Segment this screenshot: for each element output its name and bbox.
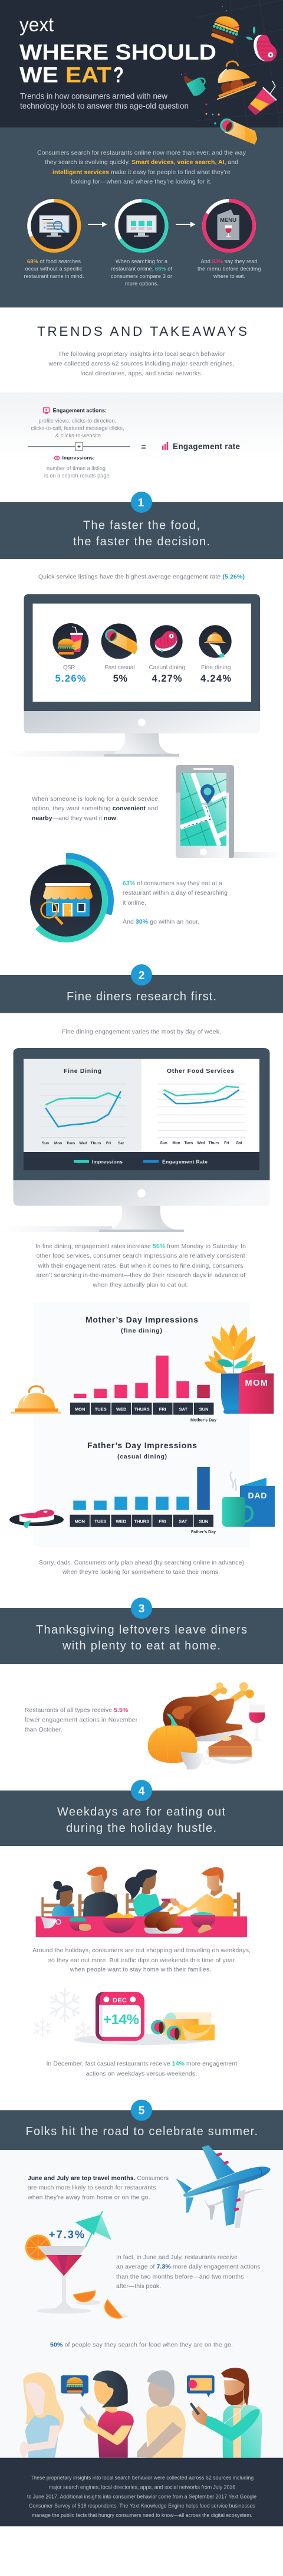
bowl 3 [191,1912,215,1915]
label: engagement actions: clicks-to-call, featured message clicks, [31,425,124,431]
icon: bars [162,442,168,450]
bar chart: mothers day: WED [116,1407,127,1412]
heading: with plenty to eat at home. [62,1639,221,1652]
caption: 66%: When searching for a [116,258,168,264]
text: 14% paragraph: In December, fast casual restaurants receive 14% more engagement [46,2060,237,2067]
heading: trends and takeaways: TRENDS AND TAKEAWAYS [37,324,247,339]
label: impressions: is on a search results page [44,473,110,479]
text: june and july [27,2175,169,2201]
heading: during the holiday hustle. [66,1822,216,1835]
heading [57,1806,225,1835]
speech bubble: burger [61,2375,88,2397]
text: trends intro: were collected across 62 sources including major search engines, [48,360,235,367]
illustration: plane [176,2145,270,2228]
panel: section 3 banner [0,1598,283,1664]
text: 7.3% paragraph: an average of 7.3% more daily engagement actions [116,2263,261,2270]
panel: footer: Consumer Survey of 518 respondents. The Yext Knowledge Engine helps food service businesses [29,2503,255,2509]
caption: 68%: occur without a specific [25,266,83,271]
heading: fathers day: Father’s Day Impressions [87,1441,197,1450]
text: 56% paragraph: with their engagement rates. But when it comes to fine dining, consumers [38,1262,243,1269]
text: 56% paragraph: other food services, consumer search impressions are relatively consistent [37,1252,245,1259]
text: 14% paragraph [46,2060,237,2077]
stat circle: 66% [117,201,166,251]
bar chart: fathers day [70,1467,216,1534]
number badge [131,2100,152,2121]
chart: other food services: Wed [197,1141,205,1145]
number badge: 5 [139,2105,145,2117]
bar chart: fathers day: SUN [199,1519,208,1524]
chart: fine dining: Fine Dining [64,1068,101,1075]
girl [52,1881,74,1916]
heading: mothers day: Mother’s Day Impressions [85,1315,198,1324]
subtitle: Trends in how consumers armed with new [20,92,167,100]
arrow [88,222,106,227]
chart: fine dining: Tues [67,1141,75,1145]
text: trends intro [48,351,235,377]
chart: fine dining: Mon [54,1141,62,1145]
icon: steak on plate [9,1510,64,1528]
illustration: flying food [181,6,277,146]
text: 14% paragraph: actions on weekdays versus weekends. [86,2070,197,2077]
icon: burrito [101,623,140,659]
label: engagement actions: profile views, clicks-to-direction, [39,418,116,424]
panel: summer background [0,2150,283,2458]
label: engagement actions: & clicks-to-website [55,433,101,438]
label: +7.3%: +7.3% [49,2229,84,2241]
illustration: family at the table [36,1867,247,1937]
legend: Engagement Rate [162,1159,208,1165]
text: sorry dads: when they’re looking for somewhere to take their moms. [62,1569,220,1576]
title: WE [19,63,58,87]
caption: 68%: restaurant name in mind. [24,273,84,279]
icon: served cloche [199,625,232,658]
illustration: cocktail [25,2211,128,2319]
chart: other food services: Mon [172,1141,180,1145]
icon: drink cup [248,81,277,115]
legend [24,1152,259,1170]
divide line: ÷ [77,444,81,450]
illustration: thanksgiving dinner [148,1682,265,1769]
bar chart: fathers day: THURS [134,1519,149,1524]
number badge: 1 [138,497,144,509]
panel: footer: manage the public facts that hungry consumers need to know—all across the digital ecosystem. [32,2512,252,2518]
bearded man [190,2368,262,2458]
number badge [131,964,152,986]
stat labels: Casual dining [149,665,185,671]
icon: coffee and dad card [222,1472,275,1527]
text: holiday paragraph: so they eat out more. But traffic dips on weekends this time of year [48,1957,235,1964]
text: 7.3% paragraph: In fact, in June and July, restaurants receive [116,2254,238,2261]
heading: mothers day [85,1315,198,1334]
text: trends intro: local directories, apps, and social networks. [80,370,203,377]
stat circle: 83%: MENU [220,217,236,224]
text: convenient and nearby: option, they want something convenient and [32,805,158,812]
label: impressions: Impressions: [62,455,95,461]
text: quick service: Quick service listings have the highest average engagement rate (5.26%) [38,574,245,581]
stat circle: 68% [29,201,79,251]
number badge [131,1598,152,1619]
text: 5.5%: Restaurants of all types receive 5.5% [25,1707,129,1714]
caption: 83%: where to eat. [213,273,245,279]
icon: steak [150,625,183,658]
panel: footer [0,2458,283,2526]
text: 63% stat: restaurant within a day of researching [123,889,228,896]
gravy boat [40,1916,56,1928]
text: holiday paragraph [32,1947,251,1973]
stat values: 5.26% [55,673,86,684]
bar chart: fathers day: TUES [94,1519,106,1524]
panel: section 1 banner [0,492,283,559]
turkey [144,1928,183,1934]
caption: 83%: And 83% say they read [200,258,257,264]
number badge: 3 [139,1603,144,1615]
subtitle: technology look to answer this age-old question [20,102,189,110]
caption: 83% [198,258,261,279]
chart: fine dining: Thurs [90,1141,101,1145]
text: june and july: when they’re away from home or on the go. [27,2194,150,2201]
label: engagement actions [31,407,124,438]
text: sorry dads [39,1559,244,1576]
label: engagement rate: Engagement rate [173,442,240,451]
monitor: fine dining vs other charts [0,1048,270,1232]
chart: fine dining: Sat [118,1141,124,1145]
illustration: burritos [151,2012,215,2040]
panel: section 2 banner [0,964,283,1013]
intro paragraph: intelligent services make it easy for people to find what they’re [52,169,231,176]
man 1 [83,1867,118,1929]
icon: monitor [44,408,50,413]
bar chart: mothers day: SUN [199,1407,209,1412]
stat values [55,673,231,684]
text: 56% paragraph [35,1243,246,1289]
number badge [131,492,152,513]
chart: fine dining: Fri [106,1141,111,1145]
text: june and july: June and July are top travel months. Consumers [28,2175,169,2182]
legend: Impressions [92,1159,123,1165]
icon: burger [210,6,242,44]
bar chart: mothers day: FRI [159,1407,166,1412]
heading: Thanksgiving leftovers leave diners [36,1623,247,1636]
text: holiday paragraph: Around the holidays, consumers are out shopping and traveling on weekdays, [32,1947,251,1954]
heading: Fine diners research first. [67,990,216,1003]
text: 56% paragraph: In fine dining, engagement rates increase 56% from Monday to Saturday. In [35,1243,246,1250]
heading: Folks hit the road to celebrate summer. [26,2125,258,2138]
chart: other food services: Tues [185,1141,193,1145]
stat circle: 83% [204,201,254,251]
number badge [131,1780,152,1801]
text: 7.3% paragraph: than the two months before—and two months [116,2273,244,2280]
man 2 [170,1867,234,1929]
heading [36,1623,247,1652]
text: holiday paragraph: when people want to stay home with their families. [70,1966,211,1973]
text: DAD: DAD [248,1491,266,1500]
icon: storefront [41,883,93,924]
intro paragraph: Consumers search for restaurants online now more than ever, and the way [37,149,246,156]
chart: other food services [157,1068,245,1145]
bowl 1 [70,1917,86,1922]
panel: holiday impressions [9,1302,275,1547]
text: 63% stat: And 30% go within an hour. [123,918,199,925]
icon: steak [246,27,277,61]
heading: fathers day: (casual dining) [117,1454,167,1461]
icon: burrito [205,103,260,146]
number badge: 4 [139,1785,145,1798]
bar chart: mothers day: THURS [134,1407,150,1412]
caption: 68% [24,258,84,279]
bowl 2 [105,1912,134,1918]
illustration: december calendar [35,1989,209,2045]
heading: the faster the decision. [73,535,210,548]
text: trends intro: The following proprietary insights into local search behavior [58,351,225,358]
intro paragraph: looking for—when and where they’re looking for it. [71,178,212,185]
icon: coffee mug [181,73,206,96]
chart: fine dining: Sun [42,1141,49,1145]
heading: mothers day: (fine dining) [121,1327,162,1334]
chart: other food services: Thurs [209,1141,219,1145]
stat labels: QSR [63,665,75,671]
arrow [176,222,195,227]
panel: footer: These proprietary insights into local search behavior were collected across 62 sources including [31,2475,254,2481]
woman [125,1869,169,1920]
chart: other food services: Sat [236,1141,243,1145]
icon: flowers and mom card [205,1324,274,1414]
bar chart: fathers day: FRI [159,1519,166,1524]
bar chart: fathers day: WED [116,1519,127,1524]
chart: other food services: Other Food Services [167,1068,234,1075]
text: 56% paragraph: aren’t searching in-the-moment—they do their research days in advance of [37,1272,245,1279]
icon: cloche with food [218,61,256,99]
text: 7.3% paragraph [116,2254,261,2290]
text: 63% stat: 63% of consumers say they eat at a [123,880,222,887]
divide line [28,443,130,450]
subtitle [20,92,189,110]
panel: engagement rate formula [0,392,283,479]
woman 2 [80,2371,134,2458]
text: 5.5%: fewer engagement actions in November [25,1716,138,1723]
text: 7.3% paragraph: after—this peak. [116,2283,161,2290]
text: convenient and nearby [32,796,158,821]
text: 5.5%: than October. [25,1726,62,1733]
phone with map [176,765,268,858]
chart: fine dining [40,1068,126,1145]
bar chart: mothers day: MON [75,1407,85,1412]
caption: 66%: more options. [125,281,159,287]
chart: storefront radial [21,856,111,945]
text: 56% paragraph: when they actually plan to eat out. [92,1282,189,1289]
chart: other food services: Sun [160,1141,167,1145]
caption: 68%: 68% of food searches [27,258,81,264]
icon: cloche [11,1386,61,1414]
text: 63% stat [123,880,228,925]
text: 5.5% [25,1707,138,1733]
bar chart: fathers day: SAT [179,1519,187,1524]
stat values: 5% [113,673,128,684]
caption: 66% [111,258,172,287]
text: convenient and nearby: When someone is looking for a quick service [32,796,158,803]
number badge: 2 [139,970,144,982]
stat values: 4.24% [200,673,231,684]
caption: 83%: the menu before deciding [198,266,261,271]
chart: other food services: Fri [224,1141,229,1145]
panel: footer: to June 2017. Additional insights into consumer behavior come from a September 2017 Yext Google [27,2493,256,2499]
label: impressions [44,455,110,479]
intro paragraph: they search is evolving quickly. Smart devices, voice search, AI, and [45,159,238,166]
panel: intro band [0,127,283,307]
heading [73,519,210,548]
title: ? [113,63,124,87]
heading: The faster the food, [83,519,200,532]
panel: header [0,0,283,127]
stat labels: Fine dining [201,665,231,671]
heading: fathers day [87,1441,197,1461]
equals: = [141,442,146,451]
logo: yext: yext [19,14,54,35]
icon: burger and drink [53,623,88,659]
chart: fine dining: Wed [79,1141,87,1145]
caption: 66%: consumers compare 3 or [111,273,172,279]
title [19,40,216,87]
text: june and july: are much more likely to search for restaurants [28,2184,156,2191]
caption: 66%: restaurant online, 66% of [111,266,172,271]
bar chart: mothers day [70,1356,216,1423]
bar chart: mothers day: Mother’s Day [190,1419,216,1423]
bar chart: mothers day: TUES [95,1407,107,1412]
text: +14%: +14% [103,2012,139,2028]
bar chart: fathers day: MON [75,1519,85,1524]
bar chart: fathers day: Father’s Day [191,1530,216,1534]
woman faded [20,2372,64,2458]
panel: footer: major search engines, local directories, apps, and social networks from July 2016 [49,2485,235,2490]
text: 63% stat: it online. [123,899,146,906]
monitor: engagement by service type [0,594,260,757]
label: engagement actions: Engagement actions: [53,407,107,413]
glasses [161,1899,176,1903]
title: WHERE SHOULD [19,40,216,64]
panel: section 5 banner [0,2100,283,2150]
stat labels [63,665,231,671]
text: DEC: DEC [113,1997,127,2004]
speech bubble: burrito [187,2375,215,2397]
stat labels: Fast casual [105,665,134,671]
bar chart: mothers day: SAT [179,1407,187,1412]
text: MOM: MOM [245,1379,268,1388]
illustration: people on phones [20,2368,262,2458]
text: sorry dads: Sorry, dads. Consumers only plan ahead (by searching online in advance) [39,1559,244,1566]
heading: Weekdays are for eating out [57,1806,225,1819]
text: 50% on the go: 50% of people say they search for food when they are on the go. [50,2342,233,2349]
panel: section 4 banner [0,1780,283,1846]
label: impressions: number of times a listing [47,466,106,472]
text: convenient and nearby: nearby—and they want it now. [32,814,118,821]
icon: eye [54,456,60,460]
intro paragraph [37,149,246,185]
stat values: 4.27% [152,673,182,684]
text: fine dining varies: Fine dining engagement varies the most by day of week. [62,1029,221,1036]
old man faded [137,2370,186,2458]
title: EAT [65,63,111,87]
